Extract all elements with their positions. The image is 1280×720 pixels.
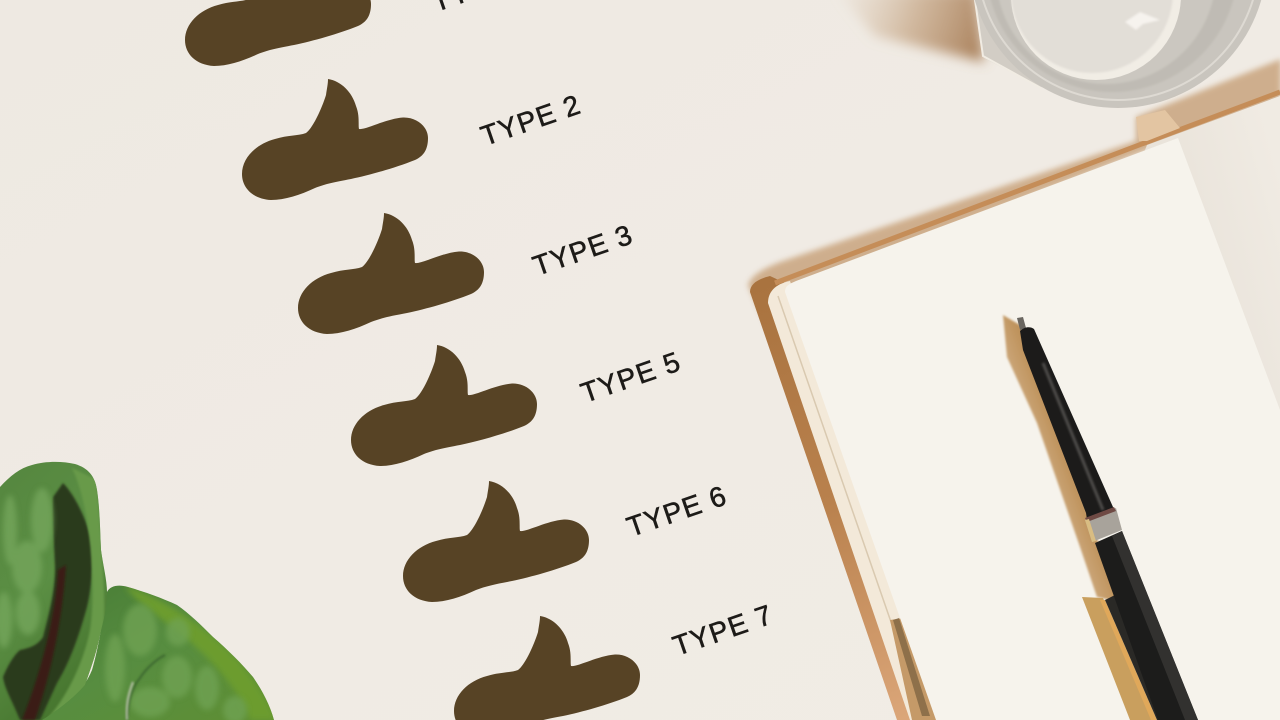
pen ring bbox=[1085, 508, 1122, 542]
glass shadow bbox=[835, 0, 984, 62]
notebook bbox=[748, 59, 1280, 720]
notebook cast shadow bbox=[748, 59, 1280, 345]
lower binding detail bbox=[890, 618, 937, 720]
glass foot corner bbox=[975, 0, 1060, 88]
glass outer ring bbox=[969, 0, 1267, 108]
pen barrel upper bbox=[1020, 327, 1117, 526]
pen bbox=[1003, 315, 1198, 720]
label: type 5: TYPE 5 bbox=[577, 346, 685, 409]
cover spine tab bbox=[1136, 110, 1180, 141]
pen clip bbox=[1100, 600, 1157, 720]
stool shape: type 3 bbox=[298, 213, 484, 334]
page stack edge bbox=[768, 281, 935, 720]
pen clip shadow bbox=[1082, 597, 1155, 720]
label: type 3: TYPE 3 bbox=[529, 219, 637, 282]
right page bbox=[920, 96, 1280, 720]
stool shape: type 6 bbox=[403, 481, 589, 602]
stool shape: type 5 bbox=[351, 345, 537, 466]
stool shape: type 1 bbox=[185, 0, 371, 66]
back leaf bbox=[42, 586, 274, 720]
stool shape: type 7 bbox=[454, 616, 640, 720]
label: type 6: TYPE 6 bbox=[623, 480, 731, 543]
pen highlight bbox=[1043, 363, 1103, 510]
left page bbox=[785, 138, 1280, 720]
pen shadow bbox=[1003, 315, 1120, 602]
glass inner water bbox=[1011, 0, 1181, 80]
dark fold bbox=[3, 483, 92, 720]
pen nib bbox=[1017, 317, 1026, 330]
label: type 2: TYPE 2 bbox=[477, 89, 585, 152]
notebook cover bbox=[750, 276, 1280, 720]
spinach leaves bbox=[0, 455, 280, 720]
label: type 7: TYPE 7 bbox=[669, 599, 777, 662]
pen barrel lower bbox=[1095, 531, 1198, 720]
glass of water bbox=[835, 0, 1267, 108]
stool shape: type 2 bbox=[242, 79, 428, 200]
cover top edge line bbox=[775, 92, 1280, 283]
front leaf bbox=[0, 455, 112, 720]
